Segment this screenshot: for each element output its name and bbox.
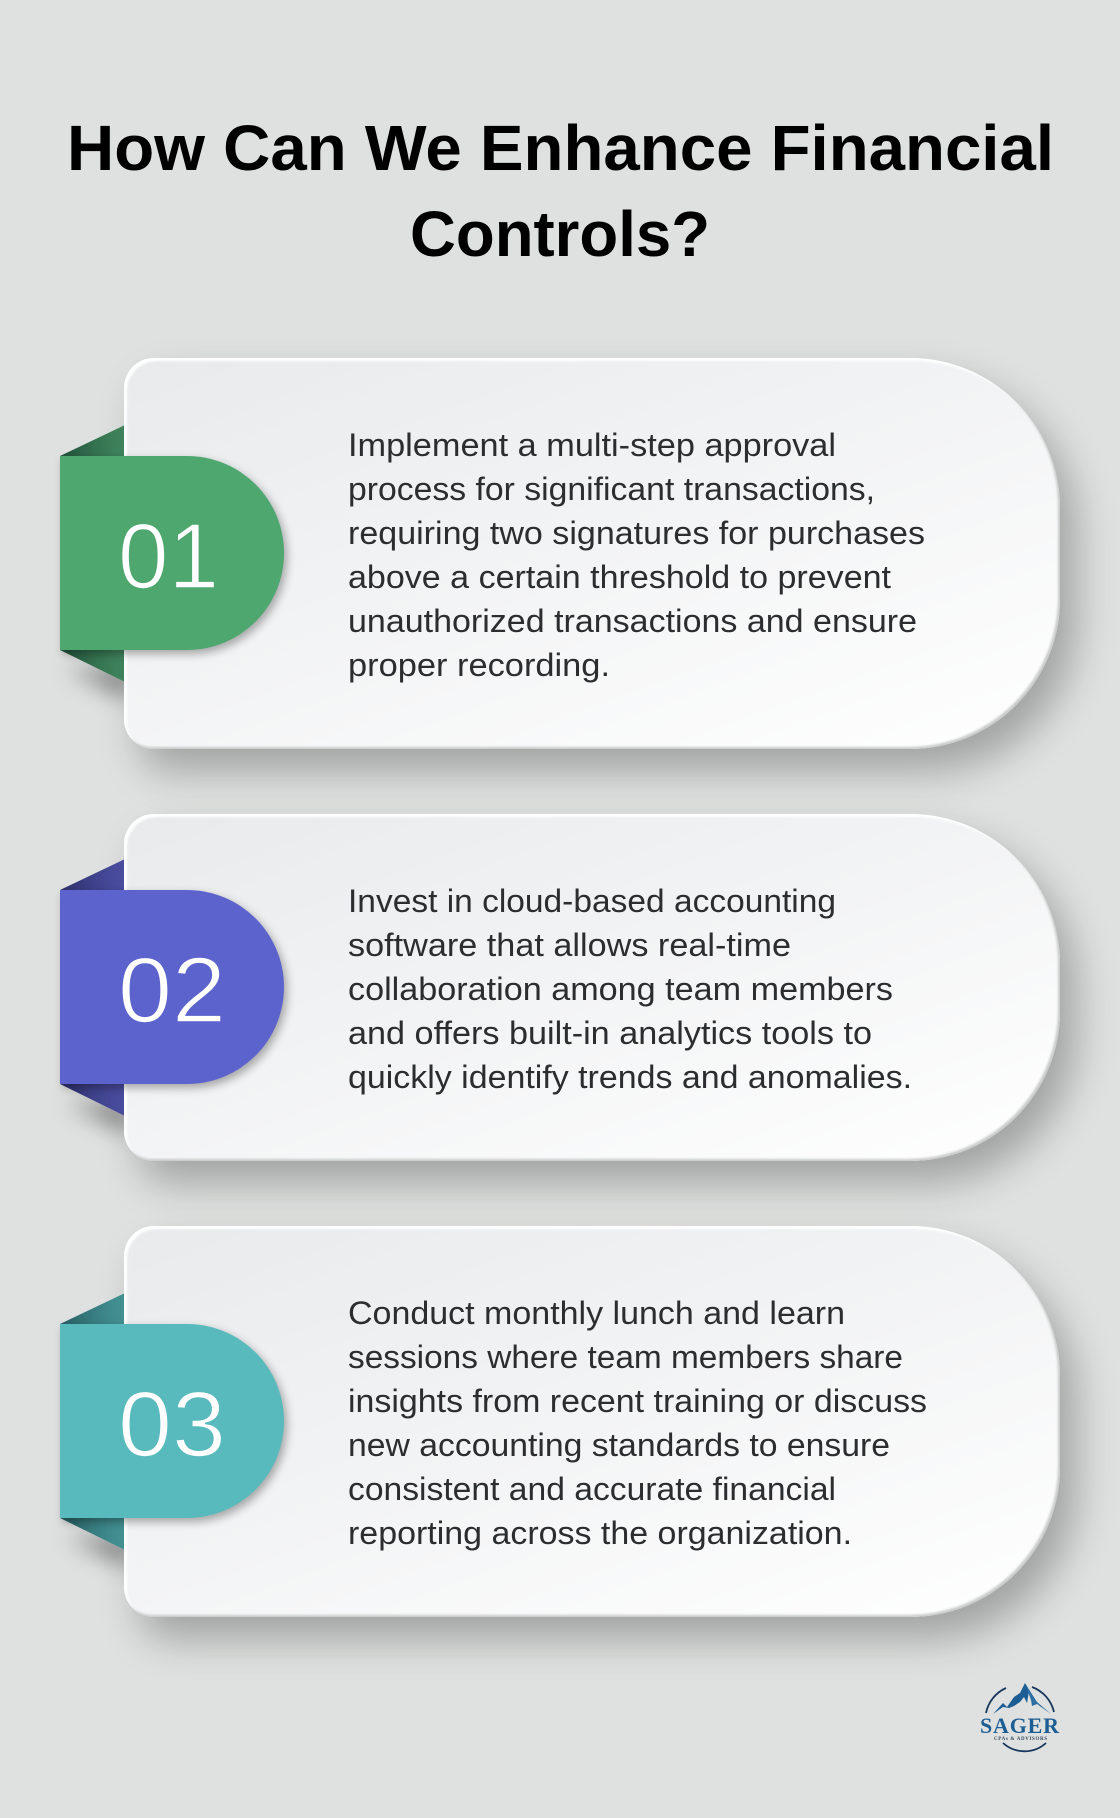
logo mountains xyxy=(993,1683,1029,1714)
folded ribbon corners 2 xyxy=(60,860,126,1142)
step 3 text: reporting across the organization. xyxy=(348,1515,852,1551)
title xyxy=(67,112,1054,270)
step number 02: 02 xyxy=(118,938,226,1042)
title: Controls? xyxy=(410,198,710,270)
step 3 text: Conduct monthly lunch and learn xyxy=(348,1295,845,1331)
step 1 text: process for significant transactions, xyxy=(348,471,875,507)
folded ribbon corners 1 xyxy=(60,426,124,708)
panel: step 1 xyxy=(58,358,1097,792)
panel: step 3 xyxy=(58,1226,1097,1660)
step 2 text: software that allows real-time xyxy=(348,927,791,963)
logo right slope xyxy=(1025,1683,1051,1714)
step 3 text: insights from recent training or discuss xyxy=(348,1383,927,1419)
panel: step 2 xyxy=(58,814,1097,1204)
step 3 text xyxy=(348,1295,927,1551)
step 1 text: proper recording. xyxy=(348,647,610,683)
step 1 text xyxy=(348,427,925,683)
logo tagline: CPAs & ADVISORS xyxy=(994,1737,1047,1742)
card background 1 xyxy=(124,358,1060,749)
title: How Can We Enhance Financial xyxy=(67,112,1054,184)
number badge 3 xyxy=(60,1324,284,1518)
card background 3 xyxy=(124,1226,1060,1617)
step 2 text: Invest in cloud-based accounting xyxy=(348,883,836,919)
step 1 text: above a certain threshold to prevent xyxy=(348,559,891,595)
step 1 text: requiring two signatures for purchases xyxy=(348,515,925,551)
logo wordmark: SAGER xyxy=(980,1713,1060,1738)
number badge 1 xyxy=(60,456,284,650)
step number 01: 01 xyxy=(118,504,219,608)
step 2 text: and offers built-in analytics tools to xyxy=(348,1015,872,1051)
step 1 text: unauthorized transactions and ensure xyxy=(348,603,917,639)
step 1 text: Implement a multi-step approval xyxy=(348,427,836,463)
step 3 text: new accounting standards to ensure xyxy=(348,1427,890,1463)
number badge 2 xyxy=(60,890,284,1084)
step 2 text: collaboration among team members xyxy=(348,971,893,1007)
step 2 text: quickly identify trends and anomalies. xyxy=(348,1059,912,1095)
step 3 text: consistent and accurate financial xyxy=(348,1471,836,1507)
folded ribbon corners 3 xyxy=(60,1294,124,1576)
step 3 text: sessions where team members share xyxy=(348,1339,903,1375)
logo ring arcs xyxy=(986,1687,1054,1751)
step number 03: 03 xyxy=(118,1372,226,1476)
step 2 text xyxy=(348,883,912,1095)
card background 2 xyxy=(124,814,1060,1161)
